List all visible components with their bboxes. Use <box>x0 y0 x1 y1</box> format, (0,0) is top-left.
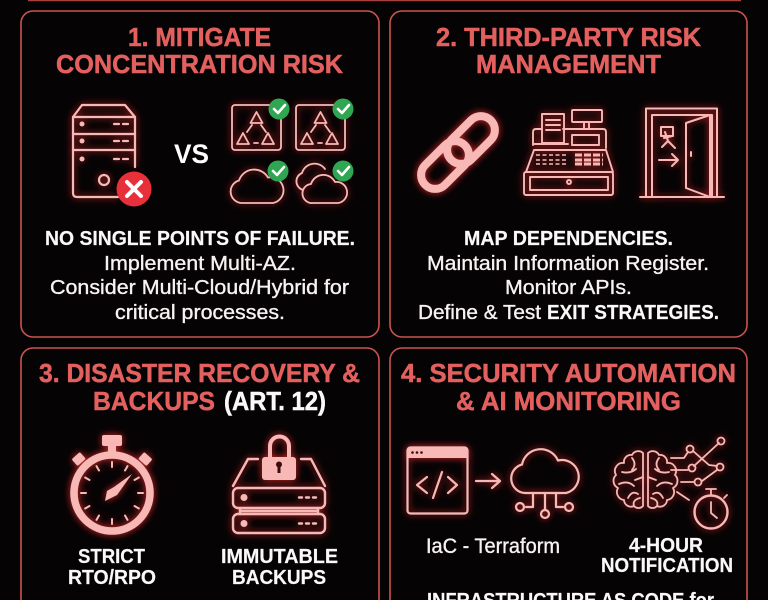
label: 4-hour notification: NOTIFICATION <box>601 555 733 577</box>
panel 4 heading: 4. SECURITY AUTOMATION <box>401 358 736 388</box>
panel 2 body text: Maintain Information Register. <box>427 252 709 275</box>
panel 3 heading <box>39 358 360 416</box>
icon: cash register <box>524 110 613 195</box>
icon: AI brain with timer <box>614 438 728 528</box>
panel 2 frame <box>390 11 747 337</box>
icon: chain links <box>415 110 501 195</box>
panel: security automation and AI monitoring <box>390 348 747 600</box>
panel 4 heading: & AI MONITORING <box>456 386 681 416</box>
icon: stopwatch <box>72 435 152 531</box>
top panel edge <box>28 0 741 2</box>
panel 2 body text: Define & Test <box>418 301 541 324</box>
panel 1 frame <box>21 11 379 337</box>
panel 1 body text <box>45 227 355 324</box>
label: strict RTO/RPO: STRICT <box>78 546 145 568</box>
panel 1 heading: 1. MITIGATE <box>128 22 271 52</box>
icon: redundant zones and clouds <box>231 98 354 203</box>
panel 1 body text: Implement Multi-AZ. <box>104 252 296 275</box>
label: strict RTO/RPO <box>68 546 156 589</box>
panel 1 heading <box>56 22 343 79</box>
panel 2 body text: Monitor APIs. <box>505 276 632 299</box>
panel 1 body text: critical processes. <box>115 301 285 324</box>
panel 1 body text: Consider Multi-Cloud/Hybrid for <box>50 276 349 299</box>
label: immutable backups <box>221 546 338 589</box>
panel: disaster recovery and backups <box>21 348 379 600</box>
label: 4-hour notification: 4-HOUR <box>629 535 704 557</box>
panel 4 heading <box>401 358 736 416</box>
panel 2 heading: MANAGEMENT <box>476 49 661 79</box>
panel 2 body text <box>418 227 719 324</box>
panel 3 heading: (ART. 12) <box>224 386 326 416</box>
arrow: code to cloud <box>476 474 500 488</box>
panel 3 heading: BACKUPS <box>93 386 215 416</box>
icon: locked backup drives <box>233 436 325 533</box>
icon: single server with failure mark <box>73 105 152 206</box>
label: strict RTO/RPO: RTO/RPO <box>68 567 156 589</box>
panel 1 heading: CONCENTRATION RISK <box>56 49 343 79</box>
panel 2 body text: MAP DEPENDENCIES. <box>464 227 673 250</box>
panel 2 body text: EXIT STRATEGIES. <box>547 301 719 324</box>
vs label: VS <box>174 139 209 169</box>
panel 4 frame <box>390 348 747 600</box>
icon: code window <box>407 447 468 514</box>
panel: mitigate concentration risk <box>21 11 379 337</box>
label: immutable backups: BACKUPS <box>232 567 326 589</box>
panel 2 heading: 2. THIRD-PARTY RISK <box>436 22 701 52</box>
icon: cloud network <box>511 449 579 518</box>
icon: exit door <box>640 108 724 197</box>
panel 3 heading: 3. DISASTER RECOVERY & <box>39 358 360 388</box>
label: IaC Terraform: IaC - Terraform <box>426 535 560 558</box>
label: immutable backups: IMMUTABLE <box>221 546 338 568</box>
panel 2 heading <box>436 22 701 79</box>
panel 3 frame <box>21 348 379 600</box>
panel: third-party risk management <box>390 11 747 337</box>
label: 4-hour notification <box>601 535 733 577</box>
panel 1 body text: NO SINGLE POINTS OF FAILURE. <box>45 227 355 250</box>
